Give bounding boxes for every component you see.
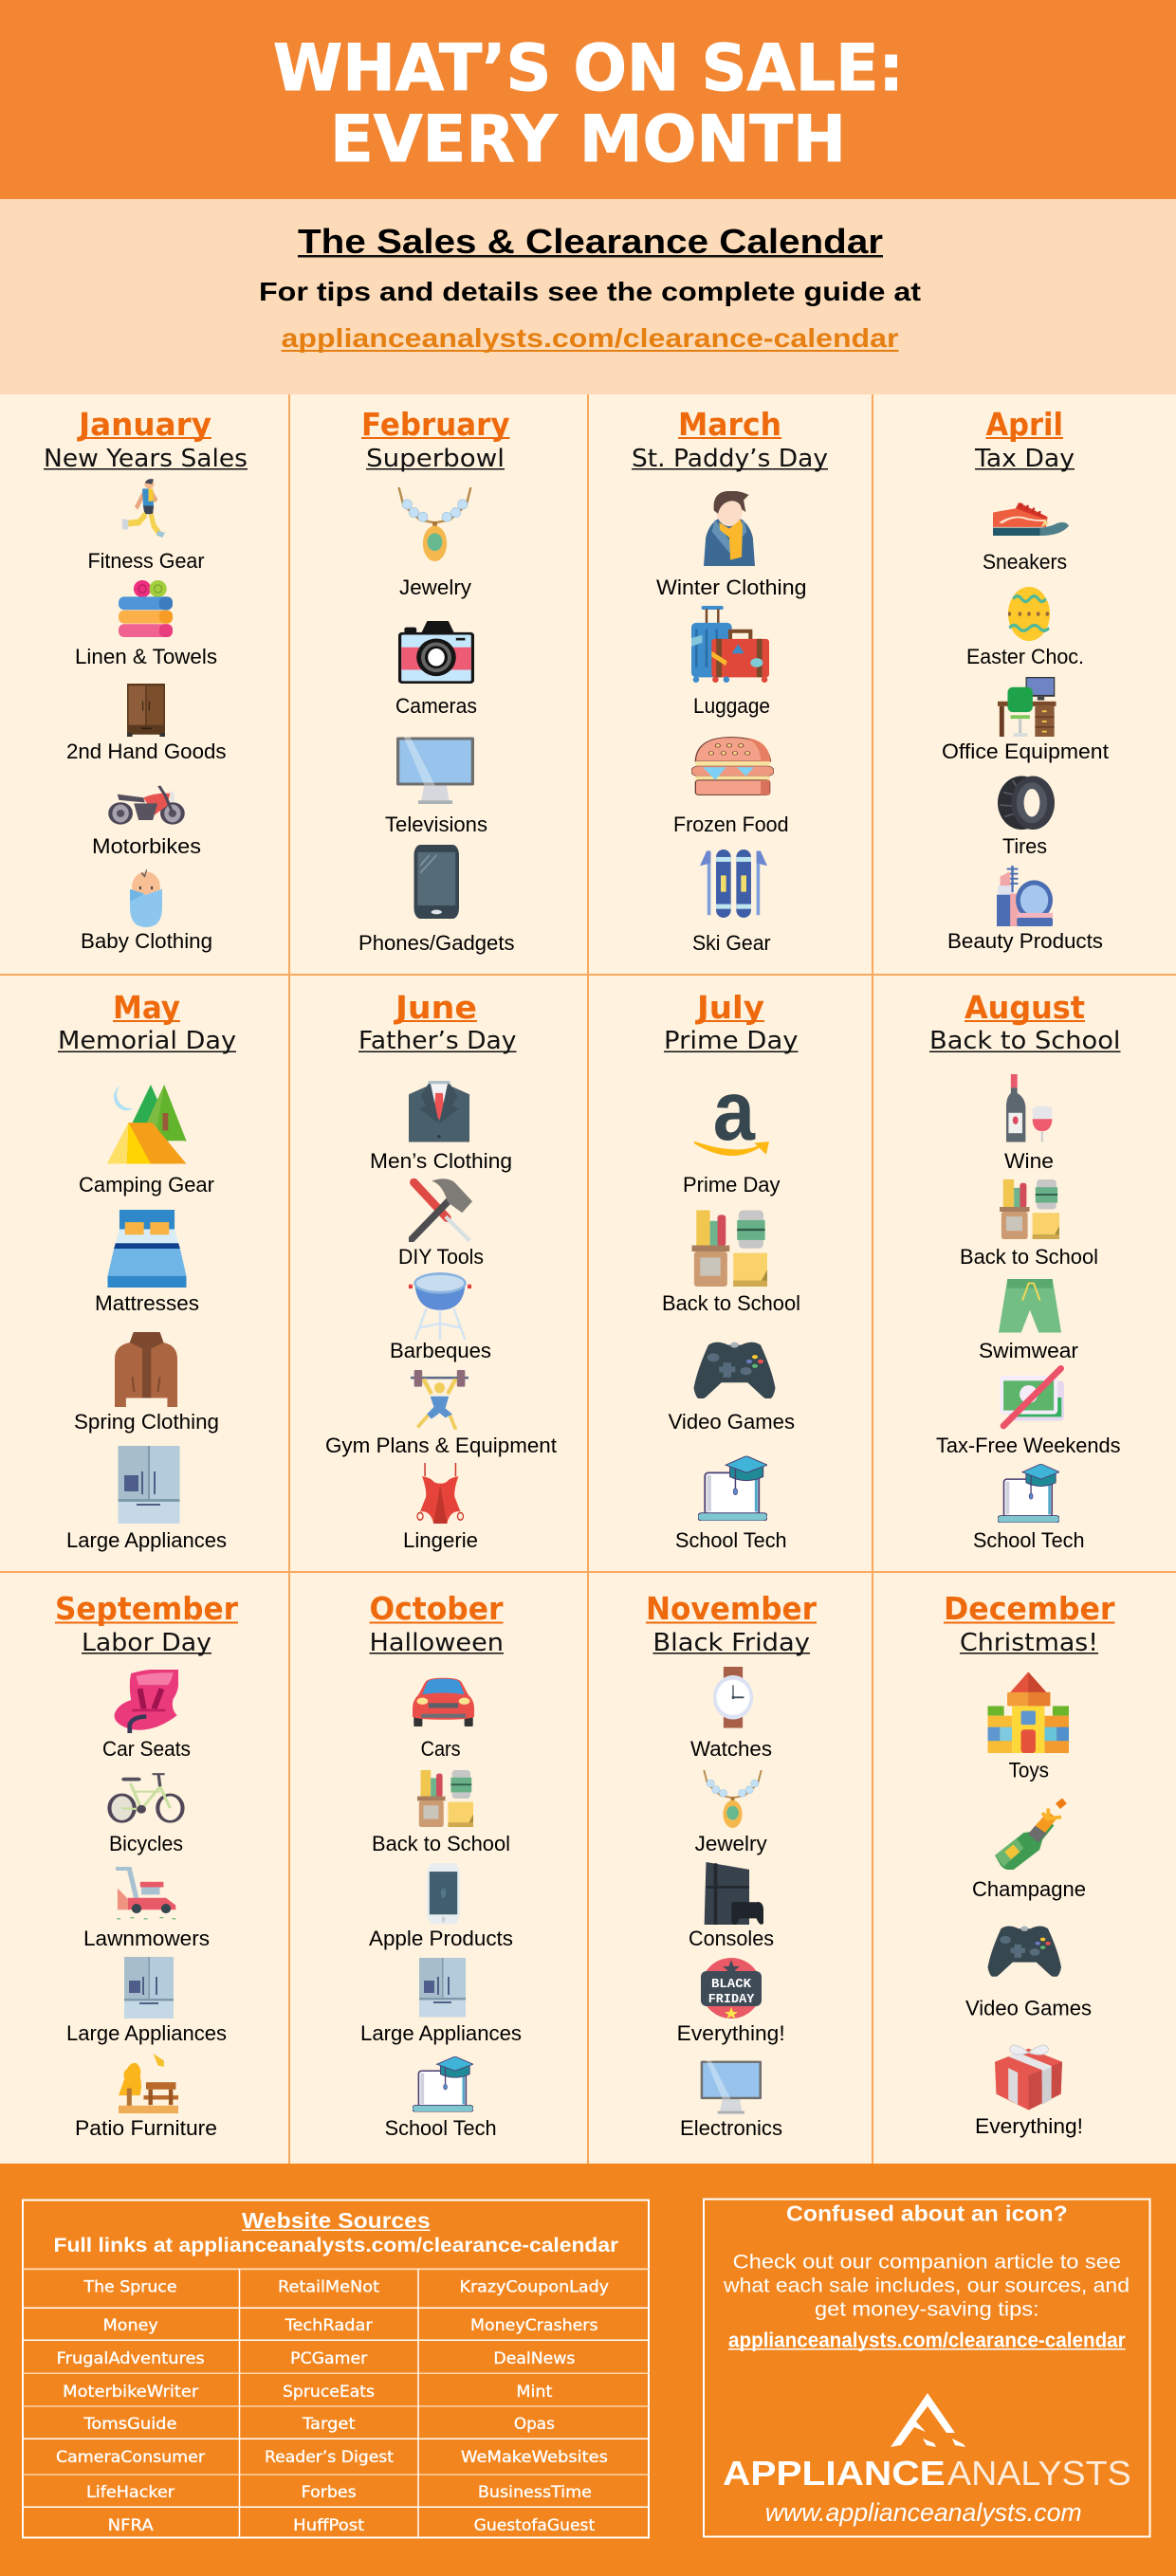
label: Tax-Free Weekends: Tax-Free Weekends: [936, 1434, 1121, 1457]
panel: January: [0, 394, 289, 975]
icon: baby: [130, 869, 162, 927]
icon: weightlifter: [411, 1370, 469, 1430]
label: Jewelry: Jewelry: [695, 1832, 767, 1855]
icon: skis: [700, 850, 767, 918]
table cells: source names: Opas: [514, 2415, 555, 2434]
icon: tire: [998, 776, 1055, 830]
label: Wine: Wine: [1004, 1149, 1054, 1173]
label: School Tech: School Tech: [675, 1528, 787, 1552]
panel: July: [588, 975, 873, 1572]
panel: title banner: [0, 0, 1176, 199]
icon: suit: [409, 1081, 469, 1142]
label: Large Appliances: Large Appliances: [360, 2021, 522, 2045]
panel: November: [588, 1572, 873, 2164]
heading: April: April: [986, 406, 1063, 443]
table cells: source names: BusinessTime: [478, 2483, 592, 2502]
label: Lingerie: Lingerie: [403, 1528, 478, 1552]
icon: crossed-out money: [1000, 1368, 1064, 1426]
label: Men's Clothing: Men’s Clothing: [370, 1149, 512, 1173]
title: [273, 31, 904, 177]
icon: bicycle: [109, 1774, 183, 1821]
heading: September: September: [55, 1590, 239, 1627]
panel: March: [588, 394, 873, 975]
icon: game controller: [694, 1343, 776, 1399]
icon: laptop with graduation cap: [413, 2056, 473, 2112]
table cells: source names: Money: [103, 2316, 158, 2335]
icon: phone: [413, 845, 459, 919]
subheading: Labor Day: Labor Day: [82, 1629, 211, 1657]
label: Cameras: Cameras: [395, 694, 477, 718]
label: Barbeques: Barbeques: [390, 1339, 491, 1362]
icon: refrigerator: [118, 1446, 180, 1524]
label: Apple Products: Apple Products: [369, 1927, 513, 1950]
icon: laptop with graduation cap: [698, 1456, 767, 1521]
heading: July: July: [695, 989, 764, 1026]
icon: swim shorts: [999, 1279, 1061, 1333]
icon: patio bench and tree: [119, 2054, 178, 2113]
icon: car seat: [115, 1669, 179, 1733]
icon: tent: [107, 1085, 186, 1164]
icon: refrigerator: [419, 1958, 466, 2018]
table cells: source names: TomsGuide: [83, 2415, 176, 2434]
icon: motorbike: [110, 786, 183, 823]
icon: black friday badge: FRIDAY: [708, 1993, 755, 2007]
panel: February: [289, 394, 588, 975]
label: Everything!: Everything!: [975, 2114, 1083, 2138]
heading: October: October: [370, 1590, 504, 1627]
subheading: New Years Sales: New Years Sales: [44, 445, 248, 473]
subheading: Memorial Day: Memorial Day: [58, 1027, 236, 1055]
panel: intro: [0, 199, 1176, 394]
label: Patio Furniture: Patio Furniture: [75, 2116, 217, 2140]
icon: laptop with graduation cap: [998, 1464, 1059, 1523]
table cells: source names: Target: [302, 2415, 356, 2434]
label: Mattresses: Mattresses: [95, 1291, 199, 1315]
icon: camera: [398, 621, 474, 684]
label: Cars: Cars: [421, 1737, 461, 1761]
heading: June: June: [394, 989, 477, 1026]
label: Bicycles: Bicycles: [109, 1832, 183, 1855]
table cells: source names: DealNews: [493, 2349, 576, 2368]
table cells: source names: TechRadar: [285, 2316, 373, 2335]
icon: apple phone: [427, 1863, 460, 1925]
label: Phones/Gadgets: Phones/Gadgets: [358, 931, 514, 955]
table cells: source names: NFRA: [108, 2516, 154, 2535]
icon: monitor: [701, 2058, 762, 2114]
label: Car Seats: Car Seats: [102, 1737, 191, 1761]
text: companion article: Check out our companion article to see: [733, 2252, 1121, 2274]
table cells: source names: KrazyCouponLady: [459, 2277, 609, 2296]
label: Watches: Watches: [690, 1737, 772, 1761]
icon: office desk: [998, 677, 1057, 737]
label: Back to School: Back to School: [960, 1245, 1098, 1269]
table cells: source names: HuffPost: [293, 2516, 365, 2535]
label: Lawnmowers: Lawnmowers: [83, 1927, 210, 1950]
text: full links: Full links at applianceanalysts.com/clearance-calendar: [53, 2234, 619, 2256]
label: Fitness Gear: Fitness Gear: [87, 549, 205, 573]
icon: school supplies: [417, 1770, 473, 1827]
link: guide url: applianceanalysts.com/clearance-calendar: [281, 323, 899, 353]
table cells: source names: CameraConsumer: [56, 2448, 205, 2467]
heading: August: August: [965, 989, 1085, 1026]
icon: watch: [713, 1667, 753, 1728]
title: EVERY MONTH: [330, 102, 846, 177]
icon: luggage: [691, 606, 769, 683]
text: companion article: what each sale includes, our sources, and: [723, 2275, 1130, 2297]
icon: champagne bottle: [995, 1798, 1067, 1870]
label: Baby Clothing: Baby Clothing: [81, 929, 212, 953]
panel: October: [289, 1572, 588, 2164]
icon: toy castle: [988, 1672, 1069, 1753]
link: clearance calendar: applianceanalysts.com/clearance-calendar: [728, 2329, 1126, 2351]
table: website sources: [23, 2200, 649, 2538]
icon: burger: [691, 738, 774, 795]
icon: refrigerator: [124, 1957, 174, 2019]
label: Easter Choc.: Easter Choc.: [966, 645, 1084, 668]
icon: barbeque: [409, 1272, 471, 1340]
logo: appliance analysts: [723, 2393, 1131, 2493]
label: Back to School: Back to School: [372, 1832, 510, 1855]
subheading: Christmas!: Christmas!: [960, 1629, 1098, 1657]
label: Swimwear: Swimwear: [979, 1339, 1078, 1362]
heading: calendar name: The Sales & Clearance Calendar: [298, 222, 883, 261]
table cells: source names: Mint: [516, 2383, 553, 2402]
table cells: source names: PCGamer: [290, 2349, 367, 2368]
table cells: source names: RetailMeNot: [278, 2277, 379, 2296]
icon: car: [413, 1678, 474, 1726]
table cells: source names: [56, 2277, 609, 2535]
label: Office Equipment: Office Equipment: [942, 740, 1109, 763]
icon: school supplies: [1000, 1179, 1059, 1239]
table cells: source names: GuestofaGuest: [474, 2516, 596, 2535]
heading: February: February: [361, 406, 510, 443]
label: Ski Gear: Ski Gear: [692, 931, 771, 955]
panel: icon help and logo: [704, 2200, 1149, 2537]
table cells: source names: MoneyCrashers: [470, 2316, 598, 2335]
label: School Tech: School Tech: [973, 1528, 1085, 1552]
heading: May: May: [113, 989, 180, 1026]
icon: easter egg: [1008, 587, 1050, 641]
heading: Website Sources: Website Sources: [242, 2208, 431, 2233]
label: Tires: Tires: [1002, 834, 1047, 858]
icon: necklace: [399, 487, 470, 561]
icon: corset: [417, 1463, 463, 1524]
icon: gift box: [995, 2045, 1062, 2110]
icon: school supplies: [692, 1210, 767, 1287]
label: Sneakers: Sneakers: [983, 550, 1067, 574]
label: Back to School: Back to School: [662, 1291, 800, 1315]
panel: April: [873, 394, 1176, 975]
label: Beauty Products: Beauty Products: [947, 929, 1103, 953]
label: Everything!: Everything!: [677, 2021, 785, 2045]
icon: wine bottle and glass: [1006, 1074, 1053, 1142]
panel: May: [0, 975, 289, 1572]
icon: amazon logo: [694, 1063, 769, 1158]
subheading: Black Friday: Black Friday: [652, 1629, 810, 1657]
table cells: source names: FrugalAdventures: [57, 2349, 205, 2368]
icon: cosmetics: [997, 866, 1053, 926]
panel: September: [0, 1572, 289, 2164]
label: Jewelry: Jewelry: [399, 575, 471, 599]
label: Spring Clothing: Spring Clothing: [74, 1410, 219, 1434]
label: Video Games: Video Games: [965, 1997, 1092, 2019]
label: Consoles: Consoles: [689, 1927, 774, 1950]
icon: black friday badge: BLACK: [711, 1977, 752, 1992]
label: Prime Day: Prime Day: [683, 1173, 780, 1197]
text: companion article: [723, 2252, 1130, 2321]
heading: December: December: [944, 1590, 1115, 1627]
label: Video Games: Video Games: [669, 1410, 795, 1434]
text: website address: www.applianceanalysts.com: [765, 2498, 1082, 2527]
subheading: Prime Day: Prime Day: [664, 1027, 799, 1055]
subheading: Back to School: Back to School: [929, 1027, 1121, 1055]
panel: footer: [0, 2164, 1176, 2576]
icon: runner: [122, 479, 165, 538]
icon: towels: [119, 580, 173, 637]
icon: sneaker: [993, 502, 1069, 536]
table cells: source names: Reader’s Digest: [265, 2448, 394, 2467]
icon: hammer and screwdriver: [412, 1178, 472, 1241]
table cells: source names: MoterbikeWriter: [63, 2383, 198, 2402]
label: Champagne: Champagne: [972, 1877, 1086, 1901]
heading: March: March: [678, 406, 781, 443]
logo: appliance analysts: ANALYSTS: [947, 2454, 1131, 2493]
icon: game controller: [988, 1927, 1061, 1978]
label: Electronics: Electronics: [680, 2116, 782, 2140]
label: Large Appliances: Large Appliances: [66, 2021, 227, 2045]
label: Camping Gear: Camping Gear: [79, 1173, 214, 1197]
title: WHAT’S ON SALE:: [273, 31, 904, 106]
label: Frozen Food: Frozen Food: [673, 813, 789, 836]
panel: December: [873, 1572, 1176, 2164]
subheading: Tax Day: Tax Day: [974, 445, 1075, 473]
label: Luggage: Luggage: [693, 694, 770, 718]
logo: appliance analysts: APPLIANCE: [723, 2454, 946, 2493]
icon: mattress: [108, 1210, 186, 1288]
icon: lawnmower: [116, 1869, 175, 1919]
panel: August: [873, 975, 1176, 1572]
subheading: Superbowl: Superbowl: [366, 445, 505, 473]
icon: black friday badge: [701, 1958, 762, 2019]
label: Winter Clothing: Winter Clothing: [656, 575, 806, 599]
label: Gym Plans & Equipment: Gym Plans & Equipment: [325, 1434, 557, 1457]
label: Large Appliances: Large Appliances: [66, 1528, 227, 1552]
label: DIY Tools: DIY Tools: [398, 1245, 484, 1269]
text: companion article: get money-saving tips:: [815, 2299, 1039, 2321]
icon: game console: [705, 1862, 763, 1926]
label: Linen & Towels: Linen & Towels: [75, 645, 217, 668]
label: Motorbikes: Motorbikes: [92, 834, 201, 858]
subheading: Father's Day: Father’s Day: [358, 1027, 516, 1055]
icon: wardrobe: [127, 684, 165, 737]
table cells: source names: The Spruce: [83, 2277, 176, 2296]
subheading: Halloween: Halloween: [370, 1629, 504, 1657]
table cells: source names: Forbes: [302, 2483, 357, 2502]
table cells: source names: SpruceEats: [283, 2383, 375, 2402]
text: guide pointer: For tips and details see the complete guide at: [259, 277, 921, 306]
table cells: source names: WeMakeWebsites: [461, 2448, 608, 2467]
panel: June: [289, 975, 588, 1572]
heading: November: November: [646, 1590, 818, 1627]
heading: Confused about an icon: Confused about an icon?: [786, 2201, 1068, 2226]
icon: jacket: [115, 1332, 177, 1407]
label: Televisions: Televisions: [385, 813, 487, 836]
icon: man in scarf: [704, 491, 755, 566]
subheading: St. Paddy's Day: St. Paddy’s Day: [632, 445, 828, 473]
label: Toys: Toys: [1009, 1758, 1049, 1782]
heading: January: January: [77, 406, 211, 443]
icon: necklace: [704, 1770, 762, 1828]
icon: television: [396, 734, 474, 804]
table cells: source names: LifeHacker: [86, 2483, 175, 2502]
label: 2nd Hand Goods: 2nd Hand Goods: [66, 740, 226, 763]
label: School Tech: School Tech: [385, 2116, 497, 2140]
